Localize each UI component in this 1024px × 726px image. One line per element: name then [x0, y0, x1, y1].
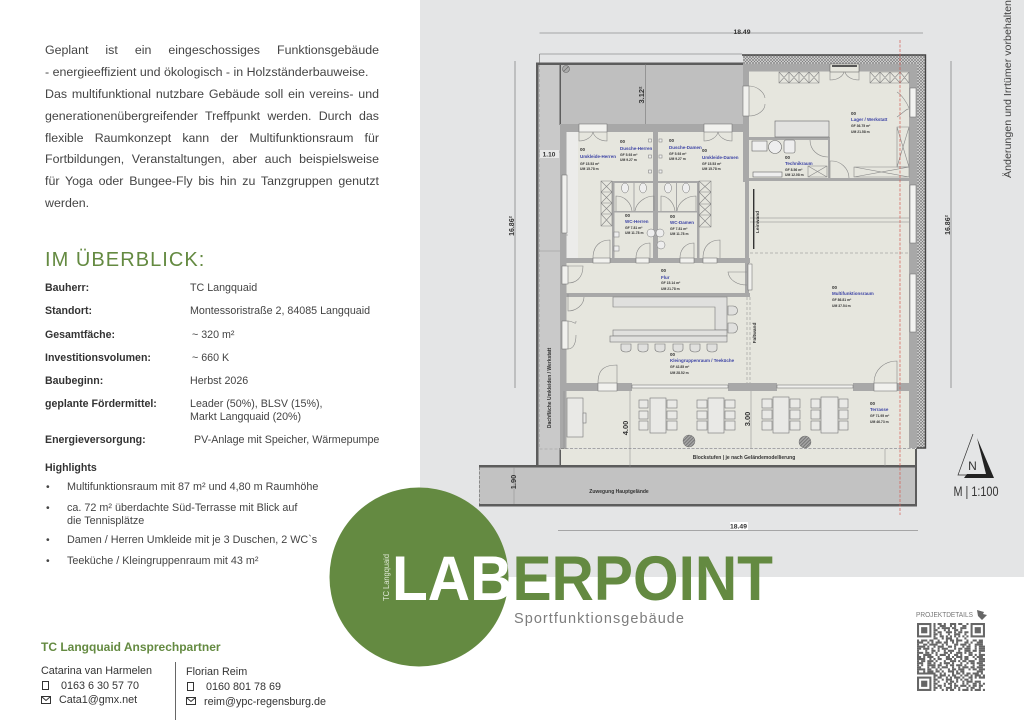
room label: Dusche-Damen: [669, 138, 702, 161]
interior walls: [560, 64, 912, 450]
room label: Flur: Flur: [661, 275, 670, 280]
dimension labels: 16.86²: [509, 215, 516, 236]
door swings: [568, 72, 909, 383]
room label: Umkleide-Herren: 00: [580, 147, 586, 152]
overview heading: IM ÜBERBLICK:: [45, 249, 205, 271]
room label: Umkleide-Damen: Umkleide-Damen: [702, 155, 739, 160]
room label: Multifunktionsraum: UM 37.54 m: [832, 304, 851, 308]
room labels: [580, 111, 890, 424]
dimension labels: 1.90: [509, 475, 518, 489]
dimension labels: Leinwand: [755, 211, 761, 233]
room label: Lager / Werkstatt: 00: [851, 111, 857, 116]
dimension lines: [515, 33, 951, 530]
room label: Flur: UM 21.78 m: [661, 287, 680, 291]
dimension labels: Dachfläche Umkleiden / Werkstatt: [547, 348, 553, 428]
room label: Multifunktionsraum: [832, 285, 874, 308]
dimension labels: 18.49: [730, 524, 747, 530]
room label: Technikraum: GF 8.56 m²: [785, 168, 803, 172]
highlights: •: [46, 503, 50, 514]
intro text: werden.: [45, 196, 89, 210]
room label: Dusche-Herren: Dusche-Herren: [620, 146, 653, 151]
room label: Eingruppenraum: [670, 352, 735, 375]
room label: Technikraum: Technikraum: [785, 161, 813, 166]
room label: WC-Damen: GF 7.81 m²: [670, 227, 688, 231]
room label: Flur: [661, 268, 681, 291]
room label: WC-Herren: WC-Herren: [625, 219, 649, 224]
room label: WC-Herren: UM 11.78 m: [625, 231, 643, 235]
room label: WC-Herren: [625, 213, 649, 235]
overview table: [45, 282, 379, 446]
dimension labels: 16.86²: [945, 214, 952, 235]
overview table: Gesamtfäche:: [45, 329, 115, 341]
dimension labels: Zuwegung Hauptgelände: [589, 489, 649, 495]
workshop counter and technical units: [752, 121, 829, 177]
room label: Flur: GF 15.14 m²: [661, 281, 681, 285]
room label: Eingruppenraum: UM 28.52 m: [670, 371, 689, 375]
highlights: Teeküche / Kleingruppenraum mit 43 m²: [67, 555, 258, 567]
room label: Lager / Werkstatt: UM 21.58 m: [851, 130, 870, 134]
terrace columns: [683, 435, 811, 448]
highlights: •: [46, 535, 50, 546]
room label: WC-Herren: 00: [625, 213, 631, 218]
room label: Eingruppenraum: GF 42.85 m²: [670, 365, 690, 369]
room label: Terrasse: 00: [870, 401, 876, 406]
intro text: [45, 43, 379, 210]
contact divider: [174, 662, 176, 720]
doors and glazing: [562, 86, 897, 391]
room label: Terrasse: GF 71.95 m²: [870, 414, 890, 418]
north arrow: N: [968, 459, 977, 473]
room label: WC-Damen: 00: [670, 214, 676, 219]
contact: Catarina van Harmelen: [41, 665, 152, 706]
highlights: Damen / Herren Umkleide mit je 3 Duschen, 2 WC`s: [67, 534, 317, 546]
overview table: Bauherr:: [45, 282, 89, 294]
contact: Catarina van Harmelen: Cata1@gmx.net: [59, 694, 137, 706]
room label: Umkleide-Herren: UM 15.78 m: [580, 167, 599, 171]
contact heading: TC Langquaid Ansprechpartner: [41, 640, 221, 654]
title: LABERPOINT: [392, 544, 773, 614]
overview table: ~ 660 K: [192, 352, 229, 364]
dimension labels: Faltwand: [752, 323, 758, 343]
room label: Umkleide-Herren: Umkleide-Herren: [580, 154, 616, 159]
roof strip west: [536, 63, 562, 466]
contact: Catarina van Harmelen: Catarina van Harmelen: [41, 665, 152, 677]
intro text: für Yoga oder Bungee-Fly bis hin zu Tanzgruppen genutzt: [45, 174, 379, 188]
room label: Umkleide-Damen: GF 15.53 m²: [702, 162, 722, 166]
room label: Umkleide-Damen: 00: [702, 148, 708, 153]
subtitle: Sportfunktionsgebäude: [514, 611, 684, 627]
intro text: Das multifunktional nutzbare Gebäude soll ein vereins- und: [45, 87, 379, 101]
highlights: die Tennisplätze: [67, 515, 144, 527]
highlights: •: [46, 482, 50, 493]
room label: Eingruppenraum: 00: [670, 352, 676, 357]
dimension labels: 3.12²: [637, 86, 646, 104]
highlights: Highlights: [45, 462, 97, 474]
room label: Dusche-Herren: [620, 139, 653, 162]
overview table: ~ 320 m²: [192, 329, 234, 341]
highlights: •: [46, 556, 50, 567]
storage shelves: [601, 72, 909, 227]
intro text: Geplant ist ein eingeschossiges Funktionsgebäude: [45, 43, 379, 57]
dimension labels: 1.10: [543, 152, 556, 158]
contact: Catarina van Harmelen: 0163 6 30 57 70: [61, 680, 139, 692]
carport roof: [536, 62, 744, 124]
red site boundary: [899, 40, 901, 515]
overview table: Standort:: [45, 305, 92, 317]
contact icons: [42, 682, 196, 704]
overview table: Markt Langquaid (20%): [190, 411, 301, 423]
brand circle: [330, 488, 508, 666]
room label: Dusche-Damen: Dusche-Damen: [669, 145, 702, 150]
side label: TC Langquaid: [381, 554, 391, 601]
room label: Terrasse: [870, 401, 890, 424]
floor plan: [479, 29, 952, 530]
intro text: Fortbildungen, Veranstaltungen, aber auch beispielsweise: [45, 152, 379, 166]
contact: Florian Reim: Florian Reim: [186, 666, 247, 678]
room label: Eingruppenraum: Kleingruppenraum / Teeküche: [670, 358, 735, 363]
room label: WC-Herren: GF 7.81 m²: [625, 226, 643, 230]
overview table: Baubeginn:: [45, 375, 103, 387]
room label: Dusche-Damen: UM 9.27 m: [669, 157, 686, 161]
access path: [479, 449, 917, 506]
overview table: Herbst 2026: [190, 375, 248, 387]
room label: Lager / Werkstatt: GF 36.75 m²: [851, 124, 871, 128]
room label: Multifunktionsraum: Multifunktionsraum: [832, 291, 874, 296]
overview table: Leader (50%), BLSV (15%),: [190, 398, 322, 410]
room label: Lager / Werkstatt: Lager / Werkstatt: [851, 117, 888, 122]
room label: Umkleide-Herren: GF 15.53 m²: [580, 162, 600, 166]
room label: Umkleide-Damen: [702, 148, 739, 171]
QR code: [917, 623, 985, 691]
room label: Lager / Werkstatt: [851, 111, 888, 134]
room label: Multifunktionsraum: GF 86.81 m²: [832, 298, 852, 302]
panel: plan background: [420, 0, 1024, 577]
scale label: M | 1:100: [954, 484, 998, 499]
room label: WC-Damen: [670, 214, 694, 236]
overview table: Energieversorgung:: [45, 434, 146, 446]
sanitary fixtures: [614, 139, 690, 251]
overview table: TC Langquaid: [190, 282, 257, 294]
room label: Terrasse: Terrasse: [870, 407, 889, 412]
highlights: ca. 72 m² überdachte Süd-Terrasse mit Blick auf: [67, 502, 297, 514]
overview table: Montessoristraße 2, 84085 Langquaid: [190, 305, 370, 317]
highlights: Multifunktionsraum mit 87 m² und 4,80 m Raumhöhe: [67, 481, 318, 493]
disclaimer: Änderungen und Irrtümer vorbehalten: [1002, 0, 1014, 178]
building interior floor: [561, 64, 912, 448]
room label: Dusche-Damen: GF 5.93 m²: [669, 152, 687, 156]
terrace furniture: [567, 397, 848, 437]
dimension labels: [509, 29, 952, 530]
dimension labels: Blockstufen | je nach Geländemodellierung: [693, 455, 795, 461]
building lines: [514, 218, 909, 504]
overview table: geplante Fördermittel:: [45, 398, 157, 410]
contact: Florian Reim: reim@ypc-regensburg.de: [204, 696, 326, 708]
dimension labels: 4.00: [621, 421, 630, 435]
room label: Technikraum: 00: [785, 155, 791, 160]
dimension labels: 18.49: [733, 29, 751, 36]
QR heading: PROJEKTDETAILS: [916, 610, 973, 619]
room label: Dusche-Herren: UM 9.27 m: [620, 158, 637, 162]
overview table: Investitionsvolumen:: [45, 352, 151, 364]
room label: Dusche-Damen: 00: [669, 138, 675, 143]
dimension labels: 3.00: [743, 412, 752, 426]
room label: WC-Damen: WC-Damen: [670, 220, 694, 225]
intro text: - energieeffizient und ökologisch - in Holzständerbauweise.: [45, 65, 368, 79]
north arrow: [958, 434, 994, 478]
highlights: [45, 462, 318, 567]
kitchen counter and stools: [610, 297, 738, 352]
room label: Terrasse: UM 46.73 m: [870, 420, 889, 424]
overview table: PV-Anlage mit Speicher, Wärmepumpe: [194, 434, 379, 446]
room label: Technikraum: [785, 155, 813, 177]
room label: Technikraum: UM 12.08 m: [785, 173, 804, 177]
room label: WC-Damen: UM 11.78 m: [670, 232, 688, 236]
outer insulated wall: [742, 55, 926, 448]
room label: Umkleide-Damen: UM 15.78 m: [702, 167, 721, 171]
room label: Dusche-Herren: 00: [620, 139, 626, 144]
intro text: generationenübergreifender Treffpunkt werden. Durch das: [45, 109, 379, 123]
room label: Flur: 00: [661, 268, 667, 273]
room label: Multifunktionsraum: 00: [832, 285, 838, 290]
intro text: flexible Raumkonzept kann der Multifunktionsraum für: [45, 131, 379, 145]
block steps: [561, 448, 917, 465]
contact: Florian Reim: 0160 801 78 69: [206, 681, 281, 693]
room label: Umkleide-Herren: [580, 147, 616, 171]
contact: Florian Reim: [186, 666, 326, 708]
room label: Dusche-Herren: GF 5.93 m²: [620, 153, 638, 157]
partition lines: [747, 189, 909, 383]
